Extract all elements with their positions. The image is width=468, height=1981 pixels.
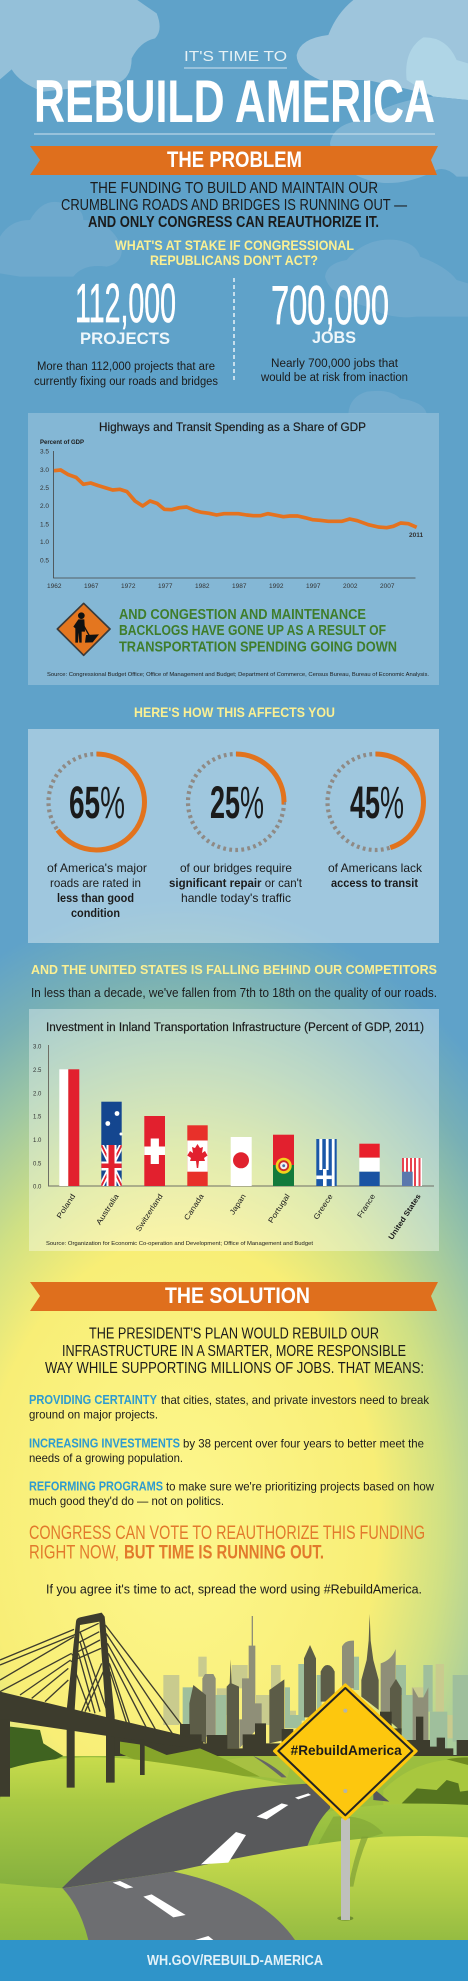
line chart	[40, 440, 423, 590]
text: road quality: In less than a decade, we've fallen from 7th to 18th on the quality of our roads.	[31, 986, 437, 1000]
ring: 65 percent roads: 65%	[69, 777, 125, 828]
axes: 1.0	[33, 1138, 42, 1144]
panel: impact rings	[28, 729, 439, 943]
problem statement: THE FUNDING TO BUILD AND MAINTAIN OUR	[90, 180, 378, 197]
chart title: Highways and Transit Spending as a Share of GDP	[99, 420, 366, 434]
question heading	[115, 237, 354, 268]
bar: United States	[402, 1158, 422, 1186]
line chart: 2011	[409, 532, 423, 539]
country labels: Switzerland	[134, 1192, 165, 1233]
stat: jobs: JOBS	[312, 329, 356, 347]
line chart: 1977	[158, 583, 173, 590]
country labels: Australia	[94, 1191, 121, 1226]
axes: 2.5	[33, 1068, 42, 1074]
point: increasing investments: INCREASING INVESTMENTS	[29, 1436, 180, 1450]
line chart: Percent of GDP	[40, 440, 84, 446]
panel: spending chart	[28, 413, 439, 685]
line chart: 1962	[47, 583, 62, 590]
call to congress: BUT TIME IS RUNNING OUT.	[124, 1542, 324, 1564]
ring: 25 percent bridges: handle today's traffic	[181, 891, 291, 905]
ring: 25 percent bridges	[169, 754, 303, 905]
icon: road work sign	[57, 603, 110, 655]
road	[0, 1783, 468, 1940]
bar: Greece	[316, 1139, 337, 1186]
source note: Source: Congressional Budget Office; Office of Management and Budget; Department of Commerce, Census Bureau, Bureau of Economic Analysis.	[47, 672, 429, 678]
heading: falling behind: AND THE UNITED STATES IS FALLING BEHIND OUR COMPETITORS	[31, 962, 437, 977]
bar: Switzerland	[144, 1116, 165, 1186]
line chart: 2002	[343, 583, 358, 590]
ring: 65 percent roads: condition	[71, 906, 120, 920]
line chart: 2.0	[40, 503, 49, 510]
callout: congestion and backlogs	[119, 607, 397, 656]
problem statement: AND ONLY CONGRESS CAN REAUTHORIZE IT.	[88, 214, 379, 231]
ring: 25 percent bridges: significant repair or can't	[169, 876, 303, 890]
line chart: 1992	[269, 583, 284, 590]
axes: 3.0	[33, 1044, 42, 1050]
road sign: #RebuildAmerica: #RebuildAmerica	[291, 1742, 402, 1758]
ring: 65 percent roads: of America's major	[47, 861, 147, 875]
point: providing certainty	[29, 1393, 430, 1422]
footer bar: WH.GOV/REBUILD-AMERICA	[147, 1953, 323, 1969]
axes	[33, 1044, 434, 1190]
country labels: France	[355, 1192, 377, 1219]
clouds	[0, 0, 468, 413]
ring: 65 percent roads	[47, 754, 147, 920]
ring: 25 percent bridges: of our bridges require	[180, 861, 292, 875]
bar: Canada	[187, 1125, 208, 1186]
panel: investment chart	[29, 1009, 439, 1251]
point: reforming programs: REFORMING PROGRAMS	[29, 1480, 163, 1494]
line chart: 1.5	[40, 522, 49, 528]
question heading: REPUBLICANS DON'T ACT?	[150, 252, 318, 268]
stat: projects: More than 112,000 projects that are	[37, 361, 215, 373]
ring: 45 percent transit: 45%	[350, 777, 404, 828]
stat: projects: PROJECTS	[80, 330, 170, 348]
stat: jobs	[260, 274, 408, 384]
country labels: Greece	[311, 1192, 335, 1221]
footer bar	[0, 1940, 468, 1981]
ribbon: the problem: THE PROBLEM	[167, 147, 302, 172]
ring: 25 percent bridges: 25%	[210, 777, 264, 828]
stat: jobs: would be at risk from inaction	[260, 372, 408, 384]
point: increasing investments: needs of a growing population.	[29, 1451, 183, 1465]
stat: projects: currently fixing our roads and bridges	[34, 376, 218, 388]
solution statement	[45, 1326, 424, 1377]
line chart: 3.0	[40, 467, 49, 474]
point: increasing investments: by 38 percent over four years to better meet the	[183, 1436, 424, 1450]
line chart: 3.5	[40, 448, 49, 456]
country labels: Portugal	[266, 1192, 292, 1225]
source note: Source: Organization for Economic Co-operation and Development; Office of Management and Budget	[46, 1241, 313, 1247]
point: reforming programs: much good they'd do — not on politics.	[29, 1494, 224, 1508]
ring: 65 percent roads: roads are rated in	[50, 876, 141, 890]
line chart: 1967	[84, 583, 99, 590]
line chart: 1982	[195, 583, 210, 590]
problem statement	[61, 180, 407, 231]
bar: France	[359, 1144, 380, 1186]
bar: Japan	[231, 1137, 252, 1186]
line chart: 2007	[380, 583, 395, 590]
country labels: Canada	[182, 1191, 206, 1222]
point: providing certainty: ground on major projects.	[29, 1408, 158, 1422]
line chart: 1972	[121, 583, 136, 590]
axes: 1.5	[33, 1114, 42, 1120]
ring: 65 percent roads: less than good	[57, 891, 134, 905]
line chart: 1997	[306, 583, 321, 590]
axes: 2.0	[33, 1092, 42, 1098]
bar: Australia	[101, 1102, 122, 1186]
ring: 45 percent transit	[328, 754, 424, 890]
point: providing certainty: that cities, states, and private investors need to break	[161, 1393, 430, 1407]
point: reforming programs	[29, 1480, 434, 1508]
bar: Portugal	[273, 1135, 294, 1186]
callout: congestion and backlogs: TRANSPORTATION SPENDING GOING DOWN	[119, 640, 397, 656]
ribbon: the problem	[30, 146, 438, 175]
callout: congestion and backlogs: AND CONGESTION AND MAINTENANCE	[119, 607, 366, 623]
line chart: 0.5	[40, 558, 49, 564]
ring: 45 percent transit: of Americans lack	[328, 861, 423, 875]
axes: 0.0	[33, 1184, 42, 1190]
axes: 0.5	[33, 1162, 42, 1168]
question heading: WHAT'S AT STAKE IF CONGRESSIONAL	[115, 237, 354, 253]
header: it's time to: IT'S TIME TO	[184, 48, 287, 65]
call to congress	[29, 1523, 425, 1564]
line chart: 1987	[232, 583, 247, 590]
bar: Poland	[59, 1069, 79, 1186]
ribbon: the solution: THE SOLUTION	[165, 1283, 310, 1308]
call to congress: RIGHT NOW,	[29, 1542, 119, 1564]
stat: jobs: 700,000	[271, 274, 389, 336]
stat: jobs: Nearly 700,000 jobs that	[271, 358, 399, 370]
ring: 45 percent transit: access to transit	[331, 876, 418, 890]
heading: how this affects you: HERE'S HOW THIS AFFECTS YOU	[134, 704, 335, 720]
point: providing certainty: PROVIDING CERTAINTY	[29, 1393, 158, 1407]
problem statement: CRUMBLING ROADS AND BRIDGES IS RUNNING OUT —	[61, 197, 407, 214]
line chart: 1.0	[40, 539, 49, 546]
solution statement: THE PRESIDENT'S PLAN WOULD REBUILD OUR	[89, 1326, 379, 1342]
road sign: #RebuildAmerica	[274, 1685, 416, 1921]
country labels: Poland	[55, 1192, 77, 1220]
callout: congestion and backlogs: BACKLOGS HAVE GONE UP AS A RESULT OF	[119, 623, 386, 639]
stat: projects	[34, 272, 218, 388]
bridge	[0, 1613, 203, 1797]
ribbon: the solution	[30, 1282, 438, 1311]
line chart: 2.5	[40, 485, 49, 492]
country labels	[55, 1191, 423, 1241]
text: spread the word: If you agree it's time to act, spread the word using #RebuildAmerica.	[46, 1582, 422, 1596]
country labels: United States	[386, 1192, 423, 1241]
country labels: Japan	[228, 1192, 248, 1216]
illustration: city, bridge and road	[0, 1613, 468, 1940]
stat: projects: 112,000	[75, 272, 176, 334]
point: reforming programs: to make sure we're prioritizing projects based on how	[166, 1480, 434, 1494]
chart title: Investment in Inland Transportation Infrastructure (Percent of GDP, 2011)	[46, 1022, 424, 1034]
hills	[0, 1727, 468, 1940]
point: increasing investments	[29, 1436, 424, 1465]
city skyline	[113, 1614, 468, 1757]
